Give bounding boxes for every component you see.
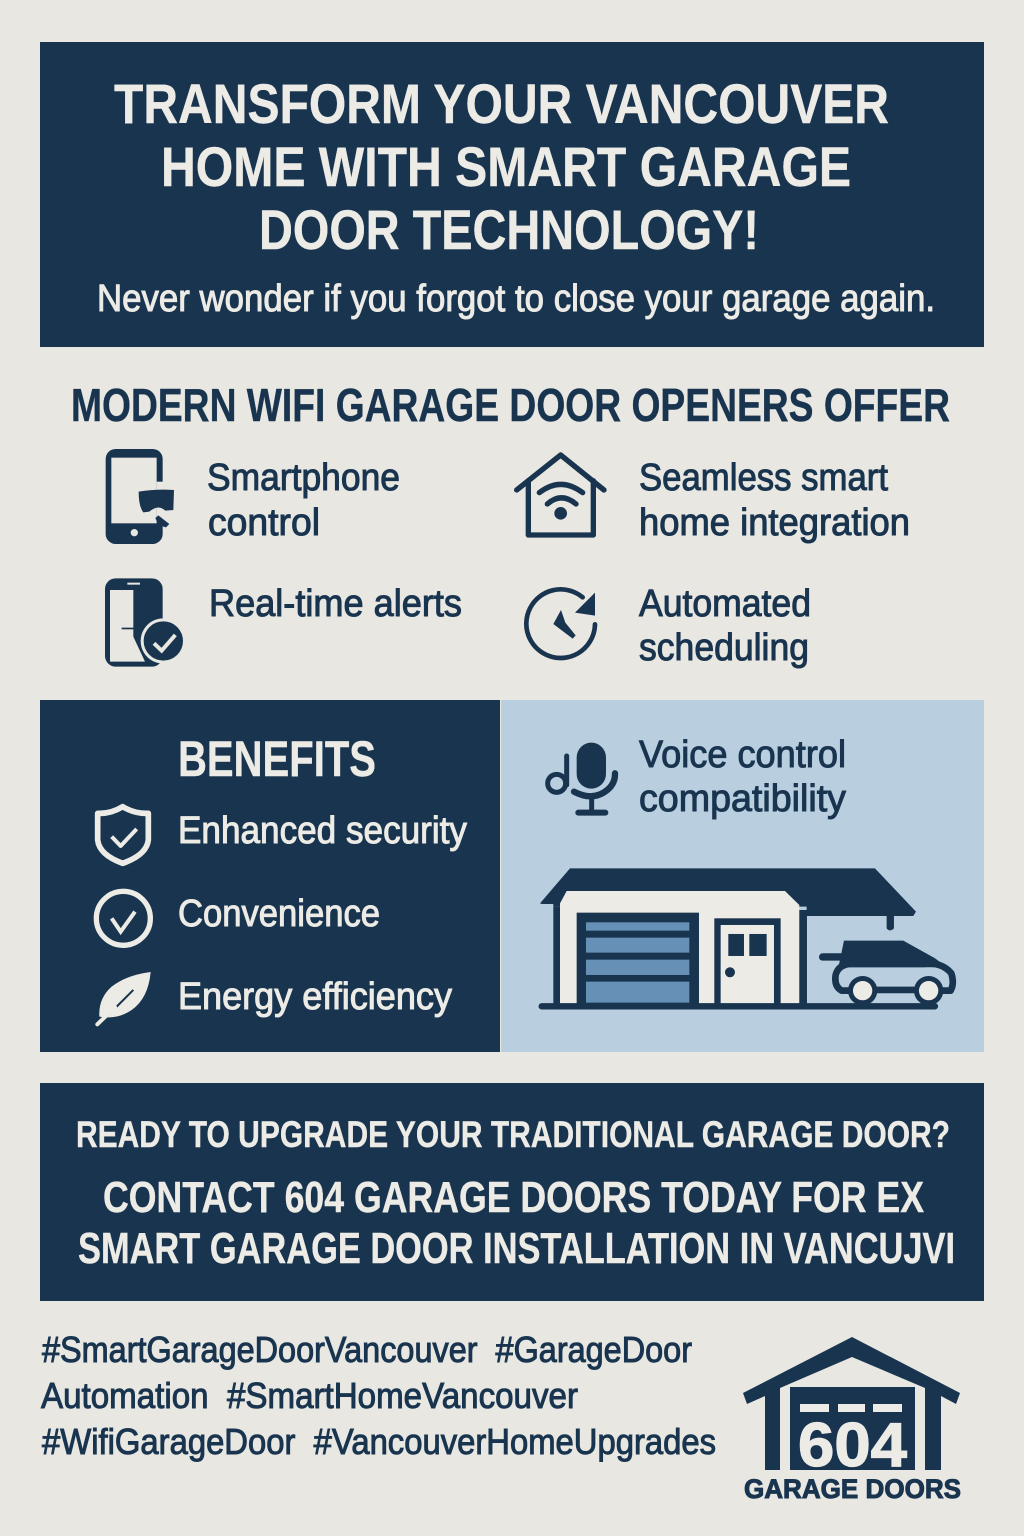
text: smartphone control: control — [208, 502, 320, 544]
text: smartphone control — [207, 457, 400, 544]
icon: microphone — [548, 743, 615, 813]
icon: leaf — [97, 972, 151, 1024]
icon: shield — [98, 807, 148, 863]
text: automated scheduling — [639, 583, 811, 669]
title: HOME WITH SMART GARAGE — [161, 135, 851, 198]
car — [823, 941, 953, 1005]
text: hashtags: #SmartGarageDoorVancouver #GarageDoor — [42, 1329, 692, 1370]
text: voice control — [639, 734, 846, 820]
subtitle: Never wonder if you forgot to close your garage again. — [97, 278, 935, 320]
text: automated scheduling: scheduling — [639, 627, 809, 669]
text: seamless smart home integration: Seamless smart — [639, 457, 888, 499]
text: seamless smart home integration: home integration — [639, 502, 910, 544]
text: hashtags: #WifiGarageDoor #VancouverHomeUpgrades — [42, 1421, 716, 1462]
panel: features — [105, 449, 910, 669]
panel: title banner — [40, 42, 984, 347]
text: automated scheduling: Automated — [639, 583, 811, 625]
icon: phone with check — [105, 578, 186, 667]
title — [114, 72, 889, 261]
icon: smart home wifi — [517, 455, 604, 535]
text: enhanced security: Enhanced security — [178, 810, 467, 852]
text: seamless smart home integration — [639, 457, 910, 544]
logo: 604 garage doors: 604 — [798, 1411, 908, 1480]
title: TRANSFORM YOUR VANCOUVER — [114, 72, 889, 135]
icon: check circle — [96, 891, 150, 945]
text: real-time alerts: Real-time alerts — [209, 583, 462, 625]
logo: 604 garage doors — [743, 1337, 961, 1504]
icon: smartphone control — [106, 449, 174, 544]
text: hashtags: Automation #SmartHomeVancouver — [41, 1375, 578, 1416]
panel: voice control and garage — [501, 700, 984, 1052]
panel: benefits — [40, 700, 500, 1052]
icon: scheduling clock — [526, 589, 595, 658]
text: smartphone control: Smartphone — [207, 457, 400, 499]
text: voice control: Voice control — [639, 734, 846, 776]
text: contact — [78, 1173, 955, 1273]
text: voice control: compatibility — [639, 778, 846, 820]
title: DOOR TECHNOLOGY! — [259, 198, 759, 261]
text: energy efficiency: Energy efficiency — [178, 976, 452, 1018]
panel: call to action — [40, 1083, 984, 1301]
text: hashtags — [41, 1329, 716, 1462]
heading: benefits: BENEFITS — [178, 731, 376, 787]
text: convenience: Convenience — [178, 893, 380, 935]
logo: 604 garage doors: GARAGE DOORS — [744, 1474, 961, 1504]
illustration: garage and car — [540, 868, 953, 1006]
